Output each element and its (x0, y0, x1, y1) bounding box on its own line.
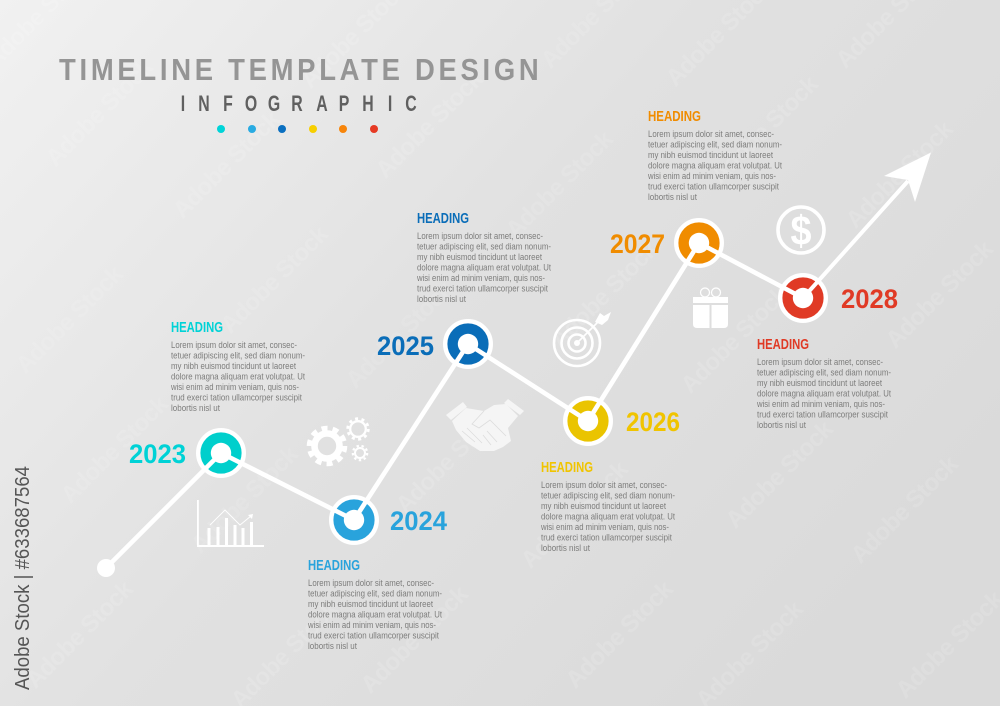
watermark pattern: Adobe Stock (56, 390, 174, 509)
watermark pattern: Adobe Stock (41, 53, 159, 172)
text block 2025: dolore magna aliquam erat volutpat. Ut (417, 262, 551, 272)
text block 2024 (307, 558, 442, 651)
text block 2027: HEADING (648, 109, 701, 125)
icon: dollar coin: $ (790, 207, 812, 254)
watermark pattern: Adobe Stock (546, 235, 664, 354)
watermark pattern: Adobe Stock (391, 400, 509, 519)
year 2028: 2028 (841, 284, 898, 314)
watermark pattern: Adobe Stock (676, 280, 794, 399)
text block 2024: dolore magna aliquam erat volutpat. Ut (308, 610, 442, 620)
text block 2028: tetuer adipiscing elit, sed diam nonum- (757, 368, 891, 378)
text block 2025: trud exerci tation ullamcorper suscipit (417, 284, 548, 294)
text block 2024: lobortis nisl ut (308, 641, 357, 651)
text block 2028: Lorem ipsum dolor sit amet, consec- (757, 357, 883, 367)
text block 2024: tetuer adipiscing elit, sed diam nonum- (308, 588, 442, 598)
text block 2023: lobortis nisl ut (171, 403, 220, 413)
icon: gift box (693, 288, 728, 328)
text block 2025 (416, 211, 551, 304)
node rings (198, 220, 826, 543)
watermark pattern: Adobe Stock (516, 455, 634, 574)
text block 2023: tetuer adipiscing elit, sed diam nonum- (171, 350, 305, 360)
text block 2026: HEADING (541, 460, 593, 476)
text block 2027: lobortis nisl ut (648, 192, 697, 202)
text block 2027: Lorem ipsum dolor sit amet, consec- (648, 129, 774, 139)
node centres (211, 233, 813, 530)
text block 2025: lobortis nisl ut (417, 294, 466, 304)
subtitle: INFOGRAPHIC (181, 93, 417, 117)
text block 2023: trud exerci tation ullamcorper suscipit (171, 392, 302, 402)
text block 2027: tetuer adipiscing elit, sed diam nonum- (648, 140, 782, 150)
text block 2027: wisi enim ad minim veniam, quis nos- (647, 171, 776, 181)
source credit: Adobe Stock | #633687564 (12, 466, 34, 690)
text block 2024: wisi enim ad minim veniam, quis nos- (307, 620, 436, 630)
colour dots row (217, 125, 378, 133)
year 2025: 2025 (377, 331, 434, 361)
text block 2027: dolore magna aliquam erat volutpat. Ut (648, 160, 782, 170)
text block 2023: HEADING (171, 320, 223, 336)
text block 2023: Lorem ipsum dolor sit amet, consec- (171, 340, 297, 350)
watermark pattern: Adobe Stock (841, 115, 959, 234)
text block 2027: trud exerci tation ullamcorper suscipit (648, 182, 779, 192)
watermark pattern: Adobe Stock (706, 70, 824, 189)
year 2023: 2023 (129, 439, 186, 469)
text block 2023 (170, 320, 305, 413)
text block 2026: dolore magna aliquam erat volutpat. Ut (541, 512, 675, 522)
text block 2024: Lorem ipsum dolor sit amet, consec- (308, 578, 434, 588)
watermark pattern: Adobe Stock (371, 65, 489, 184)
watermark pattern: Adobe Stock (881, 235, 999, 354)
watermark pattern: Adobe Stock (21, 575, 139, 694)
watermark pattern: Adobe Stock (356, 580, 474, 699)
watermark pattern: Adobe Stock (501, 125, 619, 244)
title: TIMELINE TEMPLATE DESIGN (59, 54, 539, 87)
text block 2024: HEADING (308, 558, 360, 574)
text block 2024: my nibh euismod tincidunt ut laoreet (308, 599, 433, 609)
text block 2028: trud exerci tation ullamcorper suscipit (757, 410, 888, 420)
text block 2025: tetuer adipiscing elit, sed diam nonum- (417, 242, 551, 252)
text block 2027: my nibh euismod tincidunt ut laoreet (648, 150, 773, 160)
icon: handshake (446, 399, 524, 451)
text block 2028 (756, 337, 891, 430)
icon: bar chart (197, 500, 264, 547)
icon: gears (309, 419, 368, 464)
icon: target (554, 312, 611, 366)
text block 2028: dolore magna aliquam erat volutpat. Ut (757, 388, 891, 398)
watermark pattern: Adobe Stock (168, 105, 286, 224)
year 2024: 2024 (390, 506, 447, 536)
watermark pattern: Adobe Stock (561, 575, 679, 694)
watermark pattern: Adobe Stock (846, 450, 964, 569)
text block 2024: trud exerci tation ullamcorper suscipit (308, 630, 439, 640)
text block 2025: HEADING (417, 211, 469, 227)
text block 2028: lobortis nisl ut (757, 420, 806, 430)
watermark pattern: Adobe Stock (11, 260, 129, 379)
text block 2026 (540, 460, 675, 553)
text block 2026: my nibh euismod tincidunt ut laoreet (541, 501, 666, 511)
timeline arrow line (97, 152, 931, 577)
text block 2028: wisi enim ad minim veniam, quis nos- (756, 399, 885, 409)
text block 2026: wisi enim ad minim veniam, quis nos- (540, 522, 669, 532)
text block 2025: wisi enim ad minim veniam, quis nos- (416, 273, 545, 283)
icon: dollar coin (778, 207, 824, 254)
watermark pattern: Adobe Stock (216, 220, 334, 339)
text block 2023: dolore magna aliquam erat volutpat. Ut (171, 372, 305, 382)
text block 2025: Lorem ipsum dolor sit amet, consec- (417, 231, 543, 241)
text block 2023: my nibh euismod tincidunt ut laoreet (171, 361, 296, 371)
text block 2026: lobortis nisl ut (541, 543, 590, 553)
year 2026: 2026 (626, 407, 680, 437)
watermark pattern: Adobe Stock (186, 440, 304, 559)
text block 2026: Lorem ipsum dolor sit amet, consec- (541, 480, 667, 490)
text block 2028: HEADING (757, 337, 809, 353)
text block 2026: tetuer adipiscing elit, sed diam nonum- (541, 490, 675, 500)
text block 2023: wisi enim ad minim veniam, quis nos- (170, 382, 299, 392)
year 2027: 2027 (610, 229, 665, 259)
text block 2027 (647, 109, 782, 202)
watermark pattern: Adobe Stock (721, 415, 839, 534)
text block 2028: my nibh euismod tincidunt ut laoreet (757, 378, 882, 388)
text block 2025: my nibh euismod tincidunt ut laoreet (417, 252, 542, 262)
text block 2026: trud exerci tation ullamcorper suscipit (541, 532, 672, 542)
watermark pattern: Adobe Stock (341, 275, 459, 394)
